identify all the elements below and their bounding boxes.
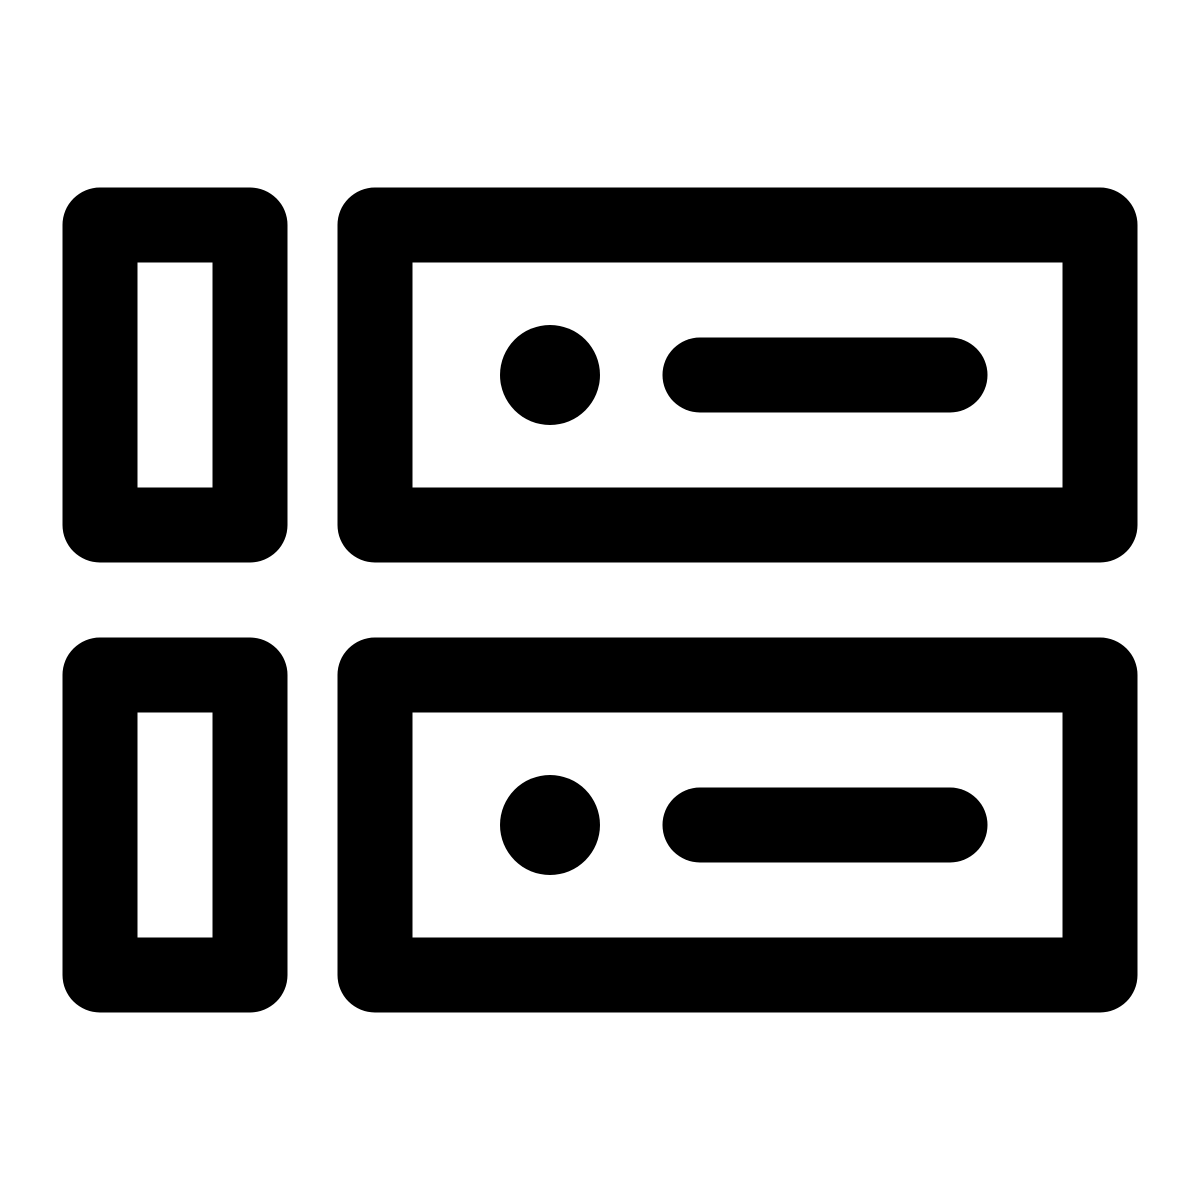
top right wide rectangle [375,225,1100,525]
bottom dash [700,788,950,862]
bottom row [100,675,1100,975]
bottom dot [500,775,600,875]
bottom right wide rectangle [375,675,1100,975]
top left narrow rectangle [100,225,250,525]
top row [100,225,1100,525]
bottom left narrow rectangle [100,675,250,975]
top dot [500,325,600,425]
top dash [700,338,950,412]
